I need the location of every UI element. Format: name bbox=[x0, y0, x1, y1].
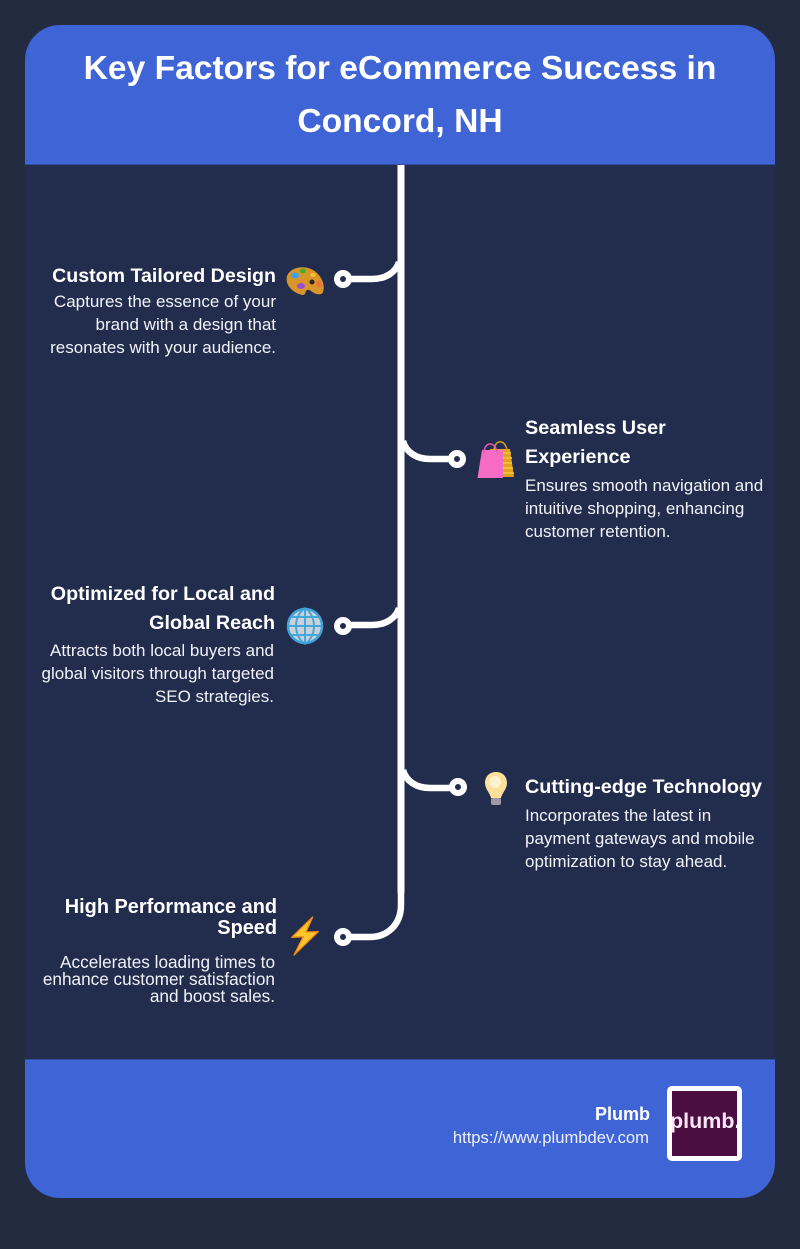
description bbox=[42, 641, 274, 706]
description: optimization to stay ahead. bbox=[525, 852, 727, 871]
description: Attracts both local buyers and bbox=[50, 641, 274, 660]
footer brand name: Plumb bbox=[595, 1104, 650, 1124]
heading: Optimized for Local and bbox=[51, 583, 275, 605]
description: payment gateways and mobile bbox=[525, 829, 755, 848]
description: global visitors through targeted bbox=[42, 664, 274, 683]
description bbox=[525, 476, 763, 541]
description: brand with a design that bbox=[95, 315, 276, 334]
item: custom tailored design bbox=[50, 265, 276, 357]
description: resonates with your audience. bbox=[50, 338, 276, 357]
heading: Seamless User bbox=[525, 417, 666, 439]
heading: High Performance and bbox=[65, 896, 277, 918]
connector: user experience bbox=[403, 441, 463, 465]
description: Incorporates the latest in bbox=[525, 806, 711, 825]
heading: Experience bbox=[525, 446, 631, 468]
heading: Cutting-edge Technology bbox=[525, 776, 762, 798]
description: intuitive shopping, enhancing bbox=[525, 499, 744, 518]
heading bbox=[525, 417, 666, 468]
logo text: plumb. bbox=[670, 1109, 740, 1133]
title bbox=[84, 50, 716, 140]
description: Ensures smooth navigation and bbox=[525, 476, 763, 495]
description: Captures the essence of your bbox=[54, 292, 276, 311]
icon: globe bbox=[287, 608, 323, 644]
heading: Custom Tailored Design bbox=[52, 265, 276, 287]
description: customer retention. bbox=[525, 522, 671, 541]
heading bbox=[51, 583, 275, 634]
heading: Speed bbox=[217, 917, 277, 939]
header band bbox=[25, 25, 775, 165]
connector: technology bbox=[403, 770, 464, 793]
connector: local and global reach bbox=[337, 608, 399, 632]
item: seamless user experience bbox=[525, 417, 763, 541]
heading bbox=[65, 896, 277, 939]
description: Accelerates loading times to bbox=[60, 952, 275, 972]
description bbox=[525, 806, 755, 871]
description: SEO strategies. bbox=[155, 687, 274, 706]
item: optimized reach bbox=[42, 583, 275, 706]
heading: Global Reach bbox=[149, 612, 275, 634]
icon: palette bbox=[287, 267, 324, 295]
title: Concord, NH bbox=[297, 103, 503, 140]
icon: light bulb bbox=[485, 772, 507, 805]
description: and boost sales. bbox=[150, 986, 275, 1006]
description bbox=[43, 952, 275, 1006]
timeline spine bbox=[398, 165, 404, 893]
title: Key Factors for eCommerce Success in bbox=[84, 50, 716, 87]
item: cutting-edge technology bbox=[525, 776, 762, 871]
footer band bbox=[25, 1059, 775, 1198]
icon: lightning bbox=[292, 917, 318, 955]
item: high performance bbox=[43, 896, 277, 1006]
icon: shopping bags bbox=[478, 442, 514, 478]
footer url: https://www.plumbdev.com bbox=[453, 1128, 649, 1147]
connector: custom design bbox=[337, 262, 399, 285]
connector: performance bbox=[337, 890, 401, 943]
description bbox=[50, 292, 276, 357]
description: enhance customer satisfaction bbox=[43, 969, 275, 989]
logo bbox=[667, 1086, 742, 1161]
